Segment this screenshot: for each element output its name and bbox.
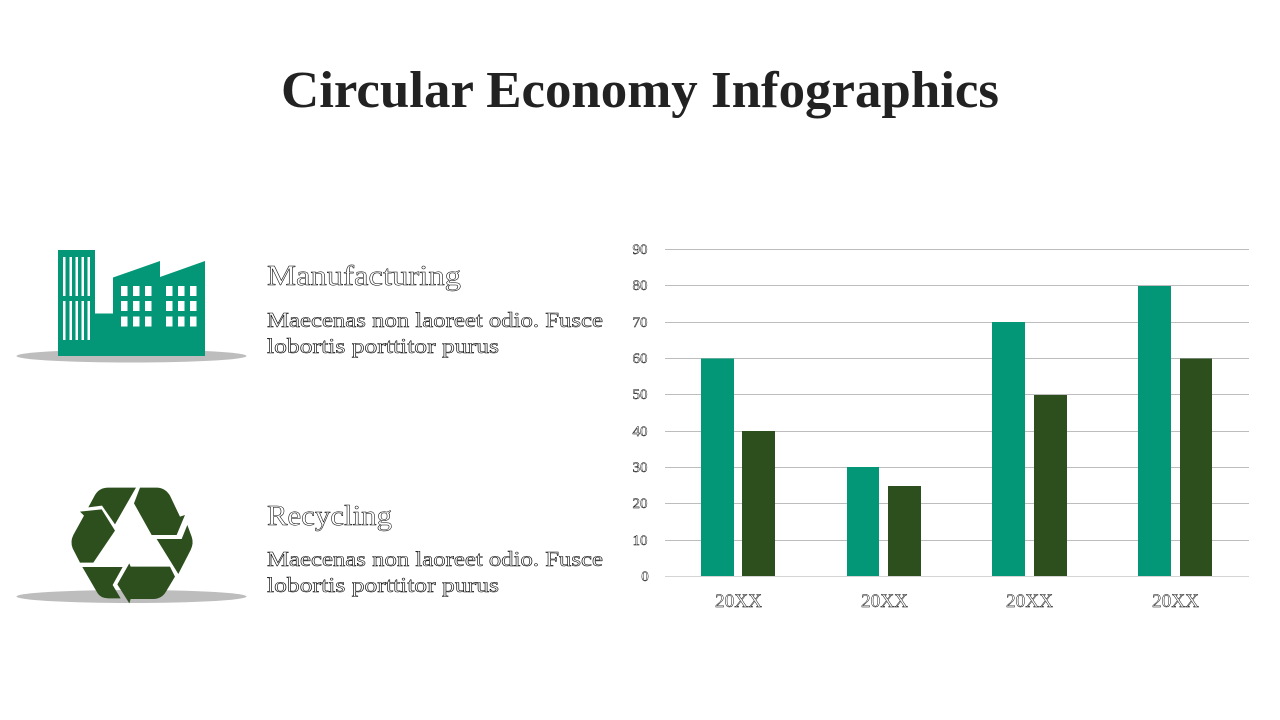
y axis labels: 30 (632, 460, 648, 476)
text block: recycling (267, 547, 603, 597)
y axis labels: 60 (632, 351, 648, 367)
bars: series 1 (701, 286, 1171, 576)
y axis labels: 0 (641, 569, 649, 585)
y axis labels: 40 (632, 424, 648, 440)
icon: recycling symbol (16, 488, 246, 603)
text block: manufacturing: lobortis porttitor purus (267, 334, 499, 358)
y axis labels: 90 (632, 242, 648, 258)
icon: factory (16, 250, 246, 362)
x axis labels: 20XX (1152, 591, 1199, 612)
text block: manufacturing: Maecenas non laoreet odio. Fusce (267, 308, 603, 332)
x axis labels: 20XX (861, 591, 908, 612)
text block: recycling: Maecenas non laoreet odio. Fusce (267, 547, 603, 571)
heading: manufacturing: Manufacturing (267, 261, 461, 292)
y axis labels: 70 (632, 315, 648, 331)
y axis labels: 10 (632, 533, 648, 549)
text block: manufacturing (267, 308, 603, 358)
y axis labels: 80 (632, 278, 648, 294)
panel: manufacturing (16, 250, 603, 362)
bar chart (632, 242, 1249, 612)
x axis labels (715, 591, 1199, 612)
bars: series 2 (742, 358, 1212, 576)
y axis labels: 50 (632, 387, 648, 403)
x axis labels: 20XX (1006, 591, 1053, 612)
title: Circular Economy Infographics (281, 62, 999, 119)
y axis labels (632, 242, 649, 585)
x axis labels: 20XX (715, 591, 762, 612)
panel: recycling (16, 488, 603, 603)
text block: recycling: lobortis porttitor purus (267, 573, 499, 597)
y axis labels: 20 (632, 496, 648, 512)
heading: recycling: Recycling (267, 501, 392, 532)
